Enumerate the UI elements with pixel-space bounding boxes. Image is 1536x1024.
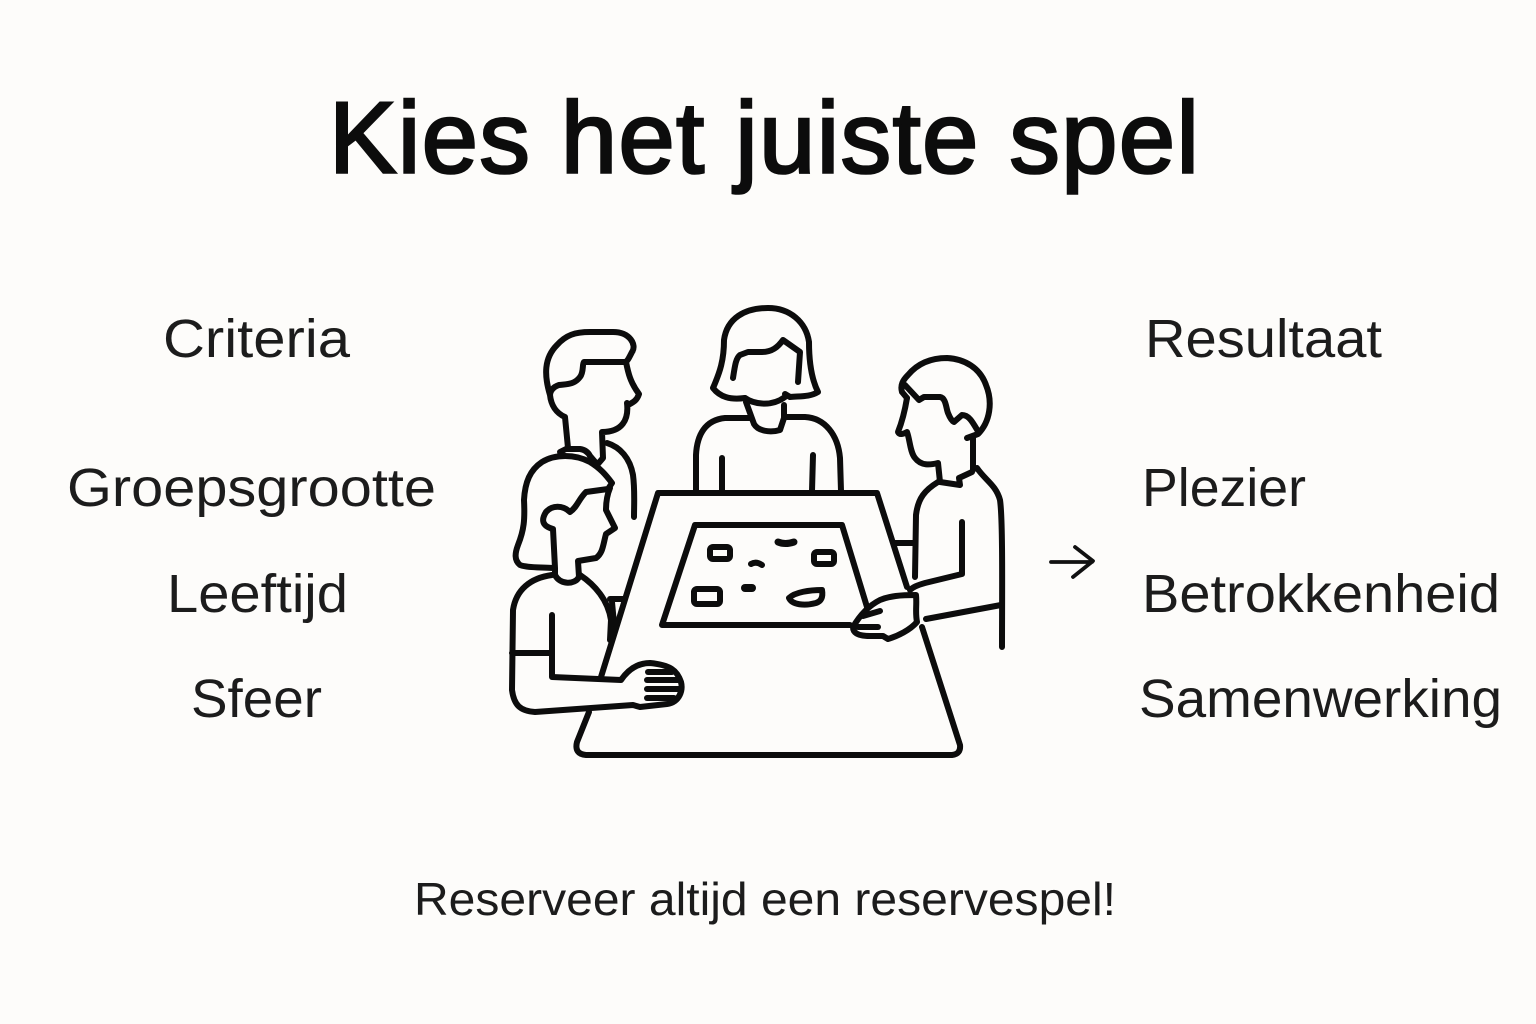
item: leeftijd: Leeftijd	[167, 564, 348, 624]
arrow	[1051, 547, 1093, 577]
person: back left man	[546, 332, 639, 517]
column: resultaat	[1139, 309, 1502, 729]
item: sfeer: Sfeer	[191, 669, 322, 729]
illustration: four people around a game table	[512, 308, 1002, 755]
item: samenwerking: Samenwerking	[1139, 669, 1502, 729]
column: criteria	[67, 309, 436, 729]
person: back centre woman	[696, 308, 841, 491]
heading: resultaat: Resultaat	[1145, 309, 1382, 369]
game board	[662, 525, 867, 625]
item: plezier: Plezier	[1142, 458, 1306, 518]
hand on board	[853, 595, 917, 639]
item: groepsgrootte: Groepsgrootte	[67, 458, 436, 518]
heading: criteria: Criteria	[163, 309, 351, 369]
title: Kies het juiste spel	[329, 82, 1199, 194]
table	[576, 493, 960, 755]
item: betrokkenheid: Betrokkenheid	[1142, 564, 1500, 624]
person: right man	[853, 358, 1002, 647]
footer note: Reserveer altijd een reservespel!	[414, 873, 1116, 925]
fingers	[647, 672, 680, 698]
game pieces	[694, 542, 834, 605]
person: front left woman	[512, 456, 682, 712]
